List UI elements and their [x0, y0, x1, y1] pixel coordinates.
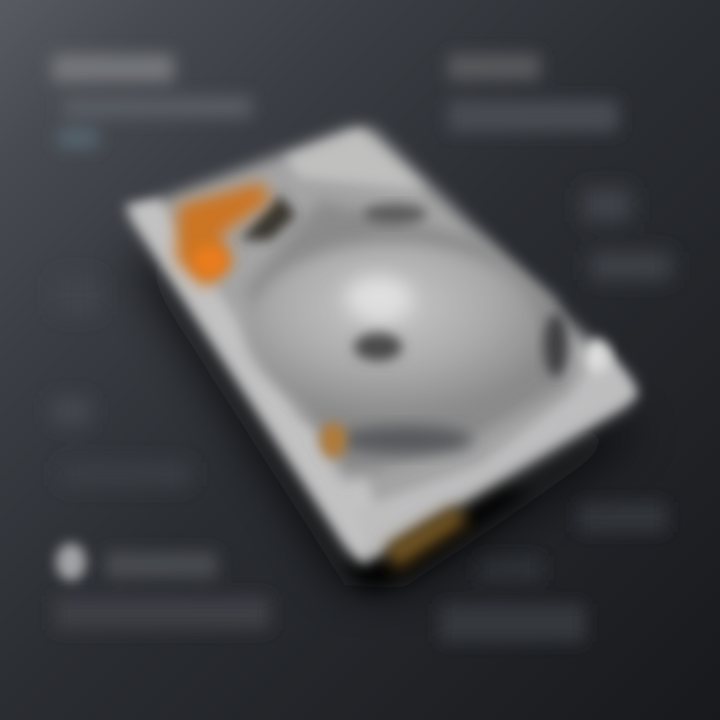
text block: right middle: [582, 188, 672, 280]
bottom rim: [355, 345, 638, 555]
text block: bottom right: [440, 502, 666, 642]
drive inner recess: [245, 200, 565, 480]
dark connector right: [544, 313, 568, 377]
orange actuator: [176, 182, 270, 288]
top plate: [285, 130, 425, 190]
dark shadow near actuator: [240, 195, 296, 240]
actuator dark slot: [363, 204, 427, 224]
bright corner right: [585, 339, 609, 373]
text block: bottom left: [55, 552, 270, 630]
drive shadow core: [345, 480, 530, 590]
drive body: [128, 128, 634, 560]
text block: top right: [448, 54, 618, 132]
icon and label: bottom left: [55, 543, 270, 630]
hard drive: [125, 128, 640, 590]
orange hot spot: [193, 246, 227, 276]
spindle dark hub: [354, 333, 402, 361]
orange small part: [320, 422, 346, 458]
shadow below platter: [337, 426, 473, 454]
orange connector bottom: [385, 505, 468, 570]
text block: left middle: [52, 275, 190, 486]
platter: [246, 242, 540, 418]
icon: round badge: [56, 543, 86, 581]
drive shadow: [135, 250, 640, 590]
spindle highlight: [346, 277, 410, 317]
left rim: [125, 200, 380, 565]
heading: top left: [52, 54, 252, 148]
